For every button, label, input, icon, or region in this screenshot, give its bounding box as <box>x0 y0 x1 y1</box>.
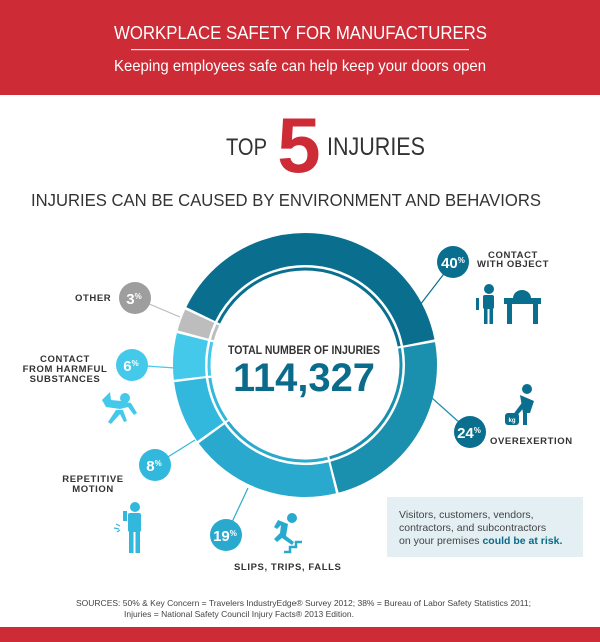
bubble: 24% overexertion: % <box>474 426 481 435</box>
callout: on your premises could be at risk. <box>399 535 562 547</box>
title: top 5 injuries <box>226 101 425 189</box>
sources: Injuries = National Safety Council Injury Facts® 2013 Edition. <box>124 609 354 619</box>
subtitle: INJURIES CAN BE CAUSED BY ENVIRONMENT AND BEHAVIORS <box>31 190 541 210</box>
icon: harmful substances <box>102 392 137 424</box>
bubble: 6% harmful substances: 6 <box>123 358 132 375</box>
bubble: 40% contact with object: CONTACT <box>488 250 538 261</box>
icon: slips <box>274 513 302 552</box>
sources: SOURCES: 50% & Key Concern = Travelers IndustryEdge® Survey 2012; 38% = Bureau of Labor Safety Statistics 2011; <box>76 598 531 608</box>
bubble: 19% slips trips falls: 19 <box>213 528 230 545</box>
bubble: 6% harmful substances: FROM HARMFUL <box>23 364 107 375</box>
bubble: 40% contact with object: 40 <box>441 255 458 272</box>
title: top 5 injuries: 5 <box>277 101 321 189</box>
bubble: 6% harmful substances <box>23 349 148 385</box>
bubble: 24% overexertion: OVEREXERTION <box>490 436 573 447</box>
bubble: 40% contact with object: WITH OBJECT <box>477 259 549 270</box>
title: top 5 injuries: INJURIES <box>327 133 425 161</box>
bubble: 19% slips trips falls: % <box>230 529 237 538</box>
bubble: 19% slips trips falls: SLIPS, TRIPS, FALLS <box>234 562 341 573</box>
icon: overexertion <box>505 384 534 425</box>
sources <box>76 598 531 619</box>
bubble: 24% overexertion <box>454 416 573 448</box>
header banner: Keeping employees safe can help keep your doors open <box>114 58 486 75</box>
icon: repetitive motion <box>114 502 141 553</box>
bubble: 3% other <box>75 282 151 314</box>
center total: TOTAL NUMBER OF INJURIES <box>228 343 380 357</box>
leader lines <box>132 262 470 535</box>
header banner: WORKPLACE SAFETY FOR MANUFACTURERS <box>114 22 487 43</box>
center total: 114,327 <box>233 356 375 400</box>
bubble: 6% harmful substances: SUBSTANCES <box>30 374 100 385</box>
icon: overexertion: kg <box>508 418 516 424</box>
callout <box>387 497 583 557</box>
bubble: 6% harmful substances: % <box>132 359 139 368</box>
bubble: 8% repetitive motion: 8 <box>146 458 155 475</box>
bubble: 24% overexertion: 24 <box>457 425 474 442</box>
bubble: 8% repetitive motion: MOTION <box>72 484 114 495</box>
bubble: 19% slips trips falls <box>210 519 341 573</box>
icon: contact with object <box>476 284 541 324</box>
bubble: 40% contact with object <box>437 246 549 278</box>
bubble: 3% other: OTHER <box>75 293 111 304</box>
title: top 5 injuries: TOP <box>226 134 267 161</box>
bubble: 8% repetitive motion <box>62 449 171 495</box>
bubble: 3% other: % <box>135 292 142 301</box>
bubble: 3% other: 3 <box>126 291 135 308</box>
header banner <box>0 0 600 95</box>
callout: contractors, and subcontractors <box>399 522 546 534</box>
bubble: 8% repetitive motion: REPETITIVE <box>62 474 124 485</box>
donut chart <box>143 203 467 527</box>
callout: Visitors, customers, vendors, <box>399 509 534 521</box>
bubble: 8% repetitive motion: % <box>155 459 162 468</box>
bubble: 40% contact with object: % <box>458 256 465 265</box>
bubble: 6% harmful substances: CONTACT <box>40 354 90 365</box>
footer bar <box>0 627 600 642</box>
